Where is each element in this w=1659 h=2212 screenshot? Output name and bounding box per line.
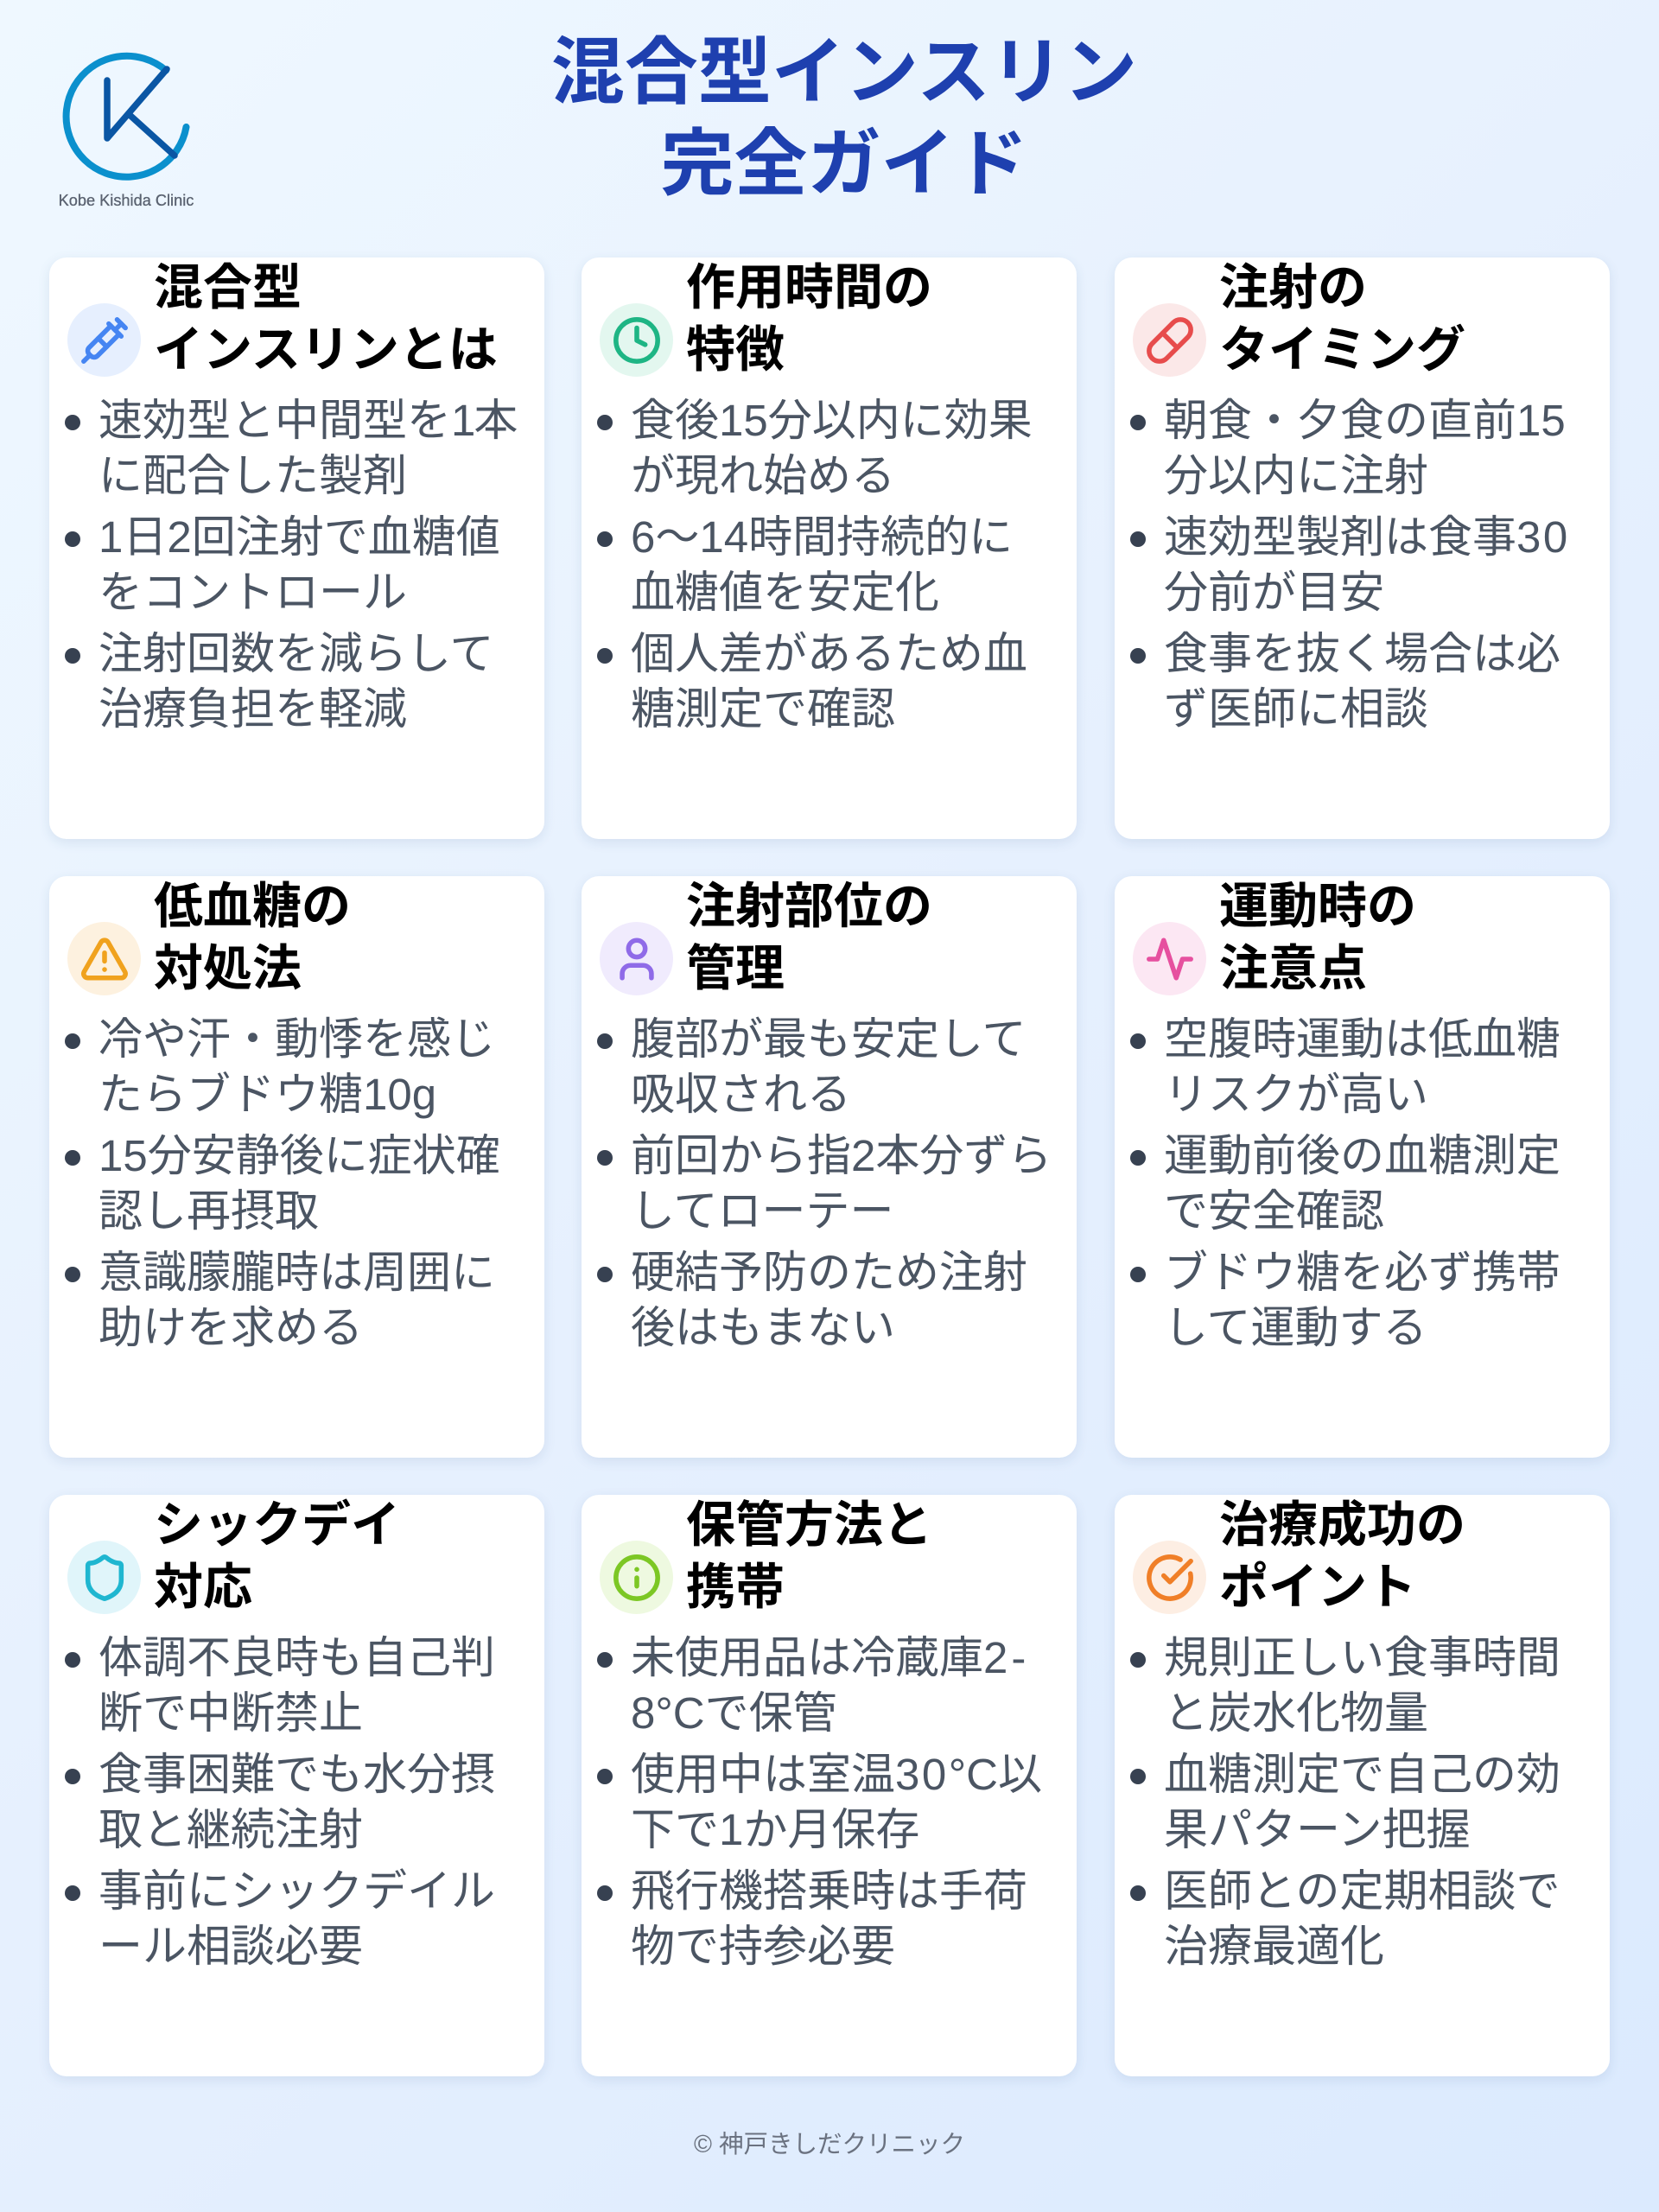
bullet list: 吸収される — [631, 1070, 851, 1119]
bullet list: 物で持参必要 — [631, 1922, 895, 1971]
bullet list — [597, 1014, 1052, 1352]
bullet list: 事前にシックデイル — [99, 1866, 495, 1916]
panel: 注射部位の管理 — [582, 876, 1077, 1458]
heading: 注射部位の — [686, 879, 932, 934]
heading: 注意点 — [1219, 941, 1367, 996]
bullet list: と炭水化物量 — [1164, 1688, 1428, 1738]
bullet list: 果パターン把握 — [1164, 1805, 1470, 1854]
logo caption: Kobe Kishida Clinic — [59, 192, 194, 209]
bullet list: 8°Cで保管 — [631, 1688, 837, 1738]
panel: 保管方法と携帯 — [582, 1495, 1077, 2076]
bullet list: 使用中は室温30°C以 — [631, 1750, 1042, 1799]
bullet list: ブドウ糖を必ず携帯 — [1164, 1248, 1560, 1297]
icon: syringe — [67, 303, 141, 377]
heading — [686, 1497, 932, 1615]
bullet list: して運動する — [1164, 1303, 1427, 1352]
heading: 運動時の — [1219, 879, 1416, 934]
bullet list: たらブドウ糖10g — [99, 1070, 436, 1119]
bullet list: 速効型製剤は食事30 — [1164, 512, 1570, 562]
bullet list: ール相談必要 — [99, 1922, 363, 1971]
bullet list: ず医師に相談 — [1164, 684, 1428, 734]
bullet list: 血糖値を安定化 — [631, 568, 939, 617]
bullet list — [65, 1014, 500, 1352]
bullet list: 下で1か月保存 — [631, 1805, 919, 1854]
bullet list: 断で中断禁止 — [99, 1688, 363, 1738]
bullet list: 食後15分以内に効果 — [631, 396, 1033, 445]
bullet list: 運動前後の血糖測定 — [1164, 1131, 1560, 1180]
bullet list: 腹部が最も安定して — [631, 1014, 1026, 1064]
bullet list: 分前が目安 — [1164, 568, 1384, 617]
bullet list — [1130, 1014, 1560, 1352]
heading: 管理 — [686, 941, 785, 996]
bullet list: 治療最適化 — [1164, 1922, 1384, 1971]
bullet list: 治療負担を軽減 — [99, 684, 407, 734]
heading: タイミング — [1219, 322, 1465, 378]
bullet list: 規則正しい食事時間 — [1164, 1633, 1560, 1682]
bullet list — [65, 396, 518, 734]
panel: 注射のタイミング — [1115, 257, 1610, 839]
icon: warning triangle — [67, 922, 141, 995]
bullet list: 食事を抜く場合は必 — [1164, 629, 1560, 678]
heading — [154, 879, 351, 996]
heading — [154, 1497, 400, 1615]
heading: 作用時間の — [686, 260, 932, 315]
icon: info — [600, 1541, 673, 1614]
panel: 治療成功のポイント — [1115, 1495, 1610, 2076]
panel: シックデイ対応 — [49, 1495, 544, 2076]
heading — [686, 260, 932, 378]
heading: 注射の — [1219, 260, 1367, 315]
bullet list: 助けを求める — [99, 1303, 363, 1352]
heading: 治療成功の — [1219, 1497, 1465, 1553]
bullet list: 個人差があるため血 — [631, 629, 1027, 678]
title: 混合型インスリン — [551, 32, 1137, 114]
bullet list: で安全確認 — [1164, 1186, 1384, 1236]
bullet list: 硬結予防のため注射 — [631, 1248, 1027, 1297]
bullet list: 飛行機搭乗時は手荷 — [631, 1866, 1027, 1916]
bullet list: 冷や汗・動悸を感じ — [99, 1014, 495, 1064]
bullet list: 後はもまない — [631, 1303, 895, 1352]
bullet list: 糖測定で確認 — [631, 684, 895, 734]
panel: 運動時の注意点 — [1115, 876, 1610, 1458]
heading: ポイント — [1219, 1560, 1416, 1615]
bullet list: 速効型と中間型を1本 — [99, 396, 518, 445]
bullet list: 認し再摂取 — [99, 1186, 319, 1236]
heading: インスリンとは — [154, 322, 498, 378]
footer: © 神戸きしだクリニック — [694, 2131, 965, 2158]
bullet list — [1130, 1633, 1560, 1971]
bullet list: 注射回数を減らして — [99, 629, 493, 678]
heading — [1219, 260, 1465, 378]
bullet list: 6～14時間持続的に — [631, 512, 1013, 562]
bullet list: 1日2回注射で血糖値 — [99, 512, 500, 562]
heading: 低血糖の — [154, 879, 351, 934]
panel: 低血糖の対処法 — [49, 876, 544, 1458]
bullet list: が現れ始める — [631, 451, 895, 500]
bullet list: 分以内に注射 — [1164, 451, 1428, 500]
heading: シックデイ — [154, 1497, 400, 1553]
bullet list: 15分安静後に症状確 — [99, 1131, 500, 1180]
bullet list: をコントロール — [99, 568, 407, 617]
bullet list: 空腹時運動は低血糖 — [1164, 1014, 1560, 1064]
icon: clock — [600, 303, 673, 377]
icon: K in circle logo mark — [62, 52, 190, 181]
heading: 対応 — [154, 1560, 252, 1615]
heading — [686, 879, 932, 996]
icon: shield — [67, 1541, 141, 1614]
title: 完全ガイド — [660, 124, 1028, 206]
bullet list: に配合した製剤 — [99, 451, 407, 500]
logo: Kobe Kishida Clinic — [59, 52, 194, 209]
bullet list — [65, 1633, 495, 1971]
bullet list: 血糖測定で自己の効 — [1164, 1750, 1560, 1799]
heading: 対処法 — [154, 941, 302, 996]
icon: check circle — [1133, 1541, 1206, 1614]
bullet list — [597, 1633, 1042, 1971]
bullet list: 医師との定期相談で — [1164, 1866, 1560, 1916]
heading — [1219, 1497, 1465, 1615]
heading: 特徴 — [686, 322, 785, 378]
bullet list: 体調不良時も自己判 — [99, 1633, 495, 1682]
heading — [154, 260, 498, 378]
bullet list: 朝食・夕食の直前15 — [1164, 396, 1566, 445]
title — [551, 32, 1137, 206]
heading: 保管方法と — [686, 1497, 932, 1553]
bullet list: リスクが高い — [1164, 1070, 1428, 1119]
bullet list: してローテー — [631, 1186, 893, 1236]
heading — [1219, 879, 1416, 996]
icon: pill — [1133, 303, 1206, 377]
bullet list: 前回から指2本分ずら — [631, 1131, 1052, 1180]
icon: activity pulse — [1133, 922, 1206, 995]
bullet list: 意識朦朧時は周囲に — [99, 1248, 495, 1297]
panel: 作用時間の特徴 — [582, 257, 1077, 839]
heading: 混合型 — [154, 260, 302, 315]
heading: 携帯 — [686, 1560, 785, 1615]
bullet list: 食事困難でも水分摂 — [99, 1750, 495, 1799]
bullet list: 未使用品は冷蔵庫2- — [631, 1633, 1029, 1682]
icon: person — [600, 922, 673, 995]
panel: 混合型インスリンとは — [49, 257, 544, 839]
bullet list — [597, 396, 1033, 734]
bullet list: 取と継続注射 — [99, 1805, 363, 1854]
bullet list — [1130, 396, 1570, 734]
